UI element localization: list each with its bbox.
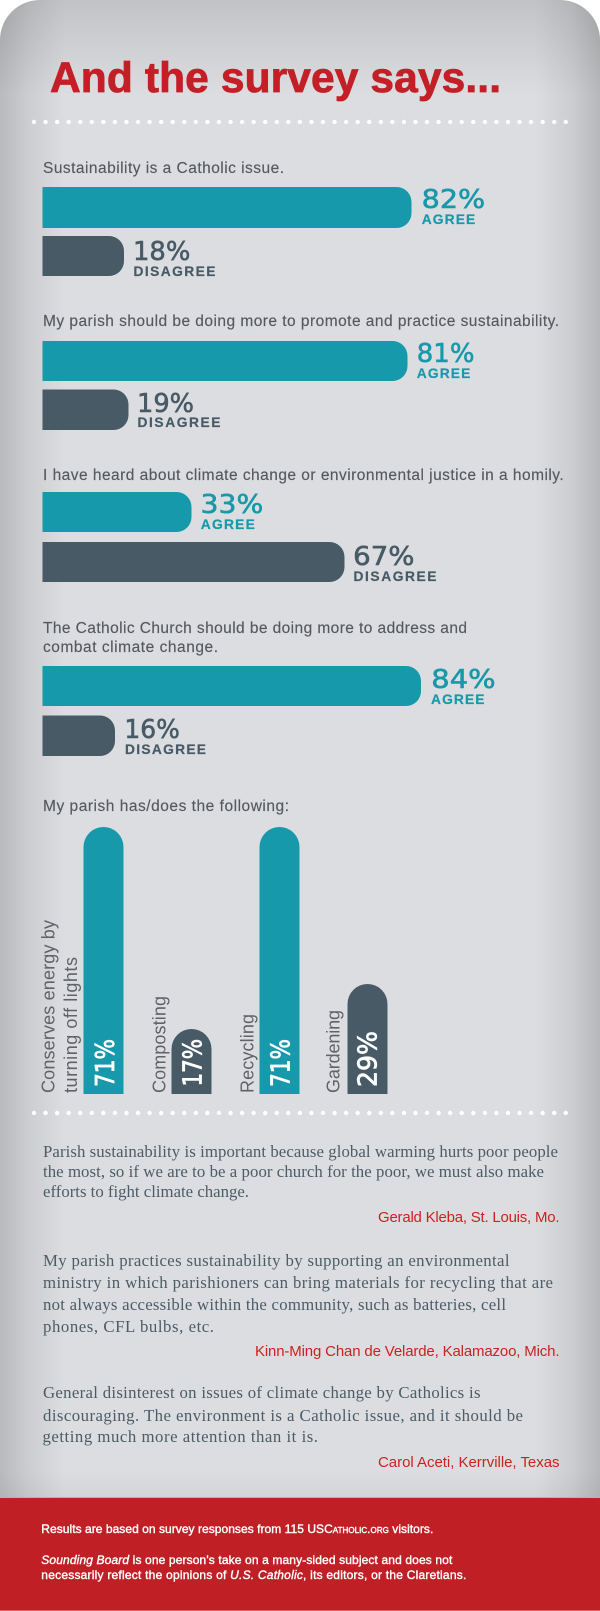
quote 1 attribution: Gerald Kleba, St. Louis, Mo. <box>378 1209 560 1226</box>
panel: question 1 <box>42 160 485 279</box>
quote 3 text: discouraging. The environment is a Catholic issue, and it should be <box>43 1406 523 1425</box>
quote 1 text: efforts to fight climate change. <box>43 1182 249 1201</box>
title: And the survey says... <box>50 55 501 102</box>
quote 1 text: the most, so if we are to be a poor church for the poor, we must also make <box>43 1162 544 1181</box>
value: 19%: 19% <box>137 389 194 419</box>
column bar 29% <box>348 984 388 1094</box>
column value 17%: 17% <box>178 1039 208 1086</box>
panel: reader quotes <box>42 1142 560 1471</box>
value: 82%: 82% <box>422 185 485 215</box>
quote 1 <box>43 1142 560 1226</box>
quote 1 text: Parish sustainability is important because global warming hurts poor people <box>43 1142 558 1161</box>
dotted divider middle <box>34 1111 568 1115</box>
column value 29%: 29% <box>354 1031 384 1087</box>
value: 16%: 16% <box>124 715 180 745</box>
question text 4: The Catholic Church should be doing more to address and <box>43 620 467 637</box>
question text 2: My parish should be doing more to promote and practice sustainability. <box>43 313 559 330</box>
panel: question 2 <box>42 313 559 430</box>
quote 2 text: ministry in which parishioners can bring materials for recycling that are <box>43 1273 553 1292</box>
panel: question 3 <box>42 467 564 584</box>
rotated label: Recycling <box>237 1014 257 1093</box>
quote 2 text: My parish practices sustainability by supporting an environmental <box>43 1251 510 1270</box>
value: 33%: 33% <box>200 490 263 520</box>
footer note: disclaimer: Sounding Board is one person's take on a many-sided subject and does not <box>41 1553 452 1567</box>
chart heading: My parish has/does the following: <box>43 798 289 815</box>
column: composting <box>149 996 212 1094</box>
bar: 84% agree <box>42 666 421 706</box>
rotated label line 1: Conserves energy by <box>38 920 58 1093</box>
quote 3 text: General disinterest on issues of climate change by Catholics is <box>43 1383 480 1402</box>
bar: 18% disagree <box>42 236 124 276</box>
quote 2 text: phones, CFL bulbs, etc. <box>43 1317 214 1336</box>
dotted divider top <box>34 120 569 124</box>
bar: 19% disagree <box>42 390 129 430</box>
column bar 71% <box>260 827 300 1094</box>
label: agree: AGREE <box>201 517 255 532</box>
question text 3: I have heard about climate change or environmental justice in a homily. <box>43 467 564 484</box>
rotated label line 2: turning off lights <box>61 957 81 1093</box>
question text 1: Sustainability is a Catholic issue. <box>43 160 284 177</box>
bar: 67% disagree <box>42 542 344 582</box>
quote 2 attribution: Kinn-Ming Chan de Velarde, Kalamazoo, Mich. <box>255 1343 560 1360</box>
label: disagree: DISAGREE <box>138 415 220 430</box>
quote 3 attribution: Carol Aceti, Kerrville, Texas <box>378 1454 560 1471</box>
bar: 82% agree <box>42 187 412 228</box>
label: agree: AGREE <box>422 212 475 227</box>
quote 2 <box>43 1251 560 1360</box>
value: 67%: 67% <box>353 542 414 572</box>
bar: 33% agree <box>42 492 192 532</box>
value: 81%: 81% <box>417 339 474 369</box>
panel: parish practices chart <box>38 798 388 1094</box>
column bar 17% <box>172 1029 212 1094</box>
bar: 16% disagree <box>42 716 115 756</box>
column bar 71% <box>84 827 124 1094</box>
column: gardening <box>324 984 388 1094</box>
footer band <box>0 1497 600 1611</box>
value: 84%: 84% <box>431 665 496 695</box>
column value 71%: 71% <box>91 1039 121 1087</box>
footer note: results: Results are based on survey responses from 115 USCatholic.org visitors. <box>41 1522 433 1536</box>
label: disagree: DISAGREE <box>125 742 206 757</box>
question text 4: combat climate change. <box>43 639 218 656</box>
quote 2 text: not always accessible within the community, such as batteries, cell <box>43 1295 506 1314</box>
column: conserves energy <box>38 827 123 1094</box>
label: agree: AGREE <box>417 366 470 381</box>
quote 3 text: getting much more attention than it is. <box>42 1427 318 1446</box>
bar: 81% agree <box>42 341 408 381</box>
column: recycling <box>237 827 300 1094</box>
footer background <box>0 1497 600 1611</box>
rotated label: Composting <box>149 996 169 1093</box>
value: 18%: 18% <box>133 237 190 267</box>
rotated label: Gardening <box>324 1010 344 1093</box>
quote 3 <box>42 1383 560 1471</box>
footer note: disclaimer: necessarily reflect the opinions of U.S. Catholic, its editors, or the Claretians. <box>41 1568 466 1582</box>
label: disagree: DISAGREE <box>354 569 436 584</box>
column value 71%: 71% <box>266 1039 296 1087</box>
panel: question 4 <box>42 620 496 757</box>
label: agree: AGREE <box>431 692 484 707</box>
label: disagree: DISAGREE <box>134 264 216 279</box>
